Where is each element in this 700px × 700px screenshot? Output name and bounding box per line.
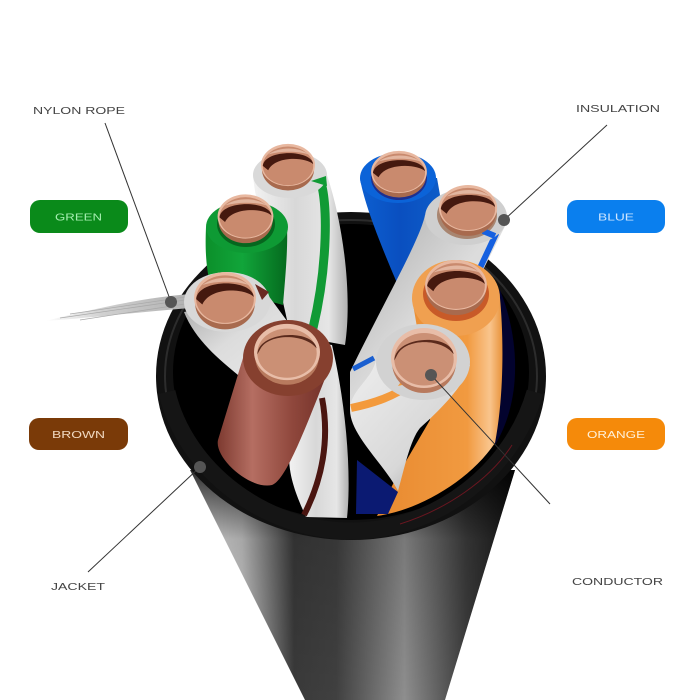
copper conductor: orange-striped [391, 328, 457, 393]
callout: nylon rope [33, 105, 177, 308]
copper conductor: brown [254, 324, 320, 385]
copper conductor: orange [425, 260, 487, 315]
callout: jacket: JACKET [51, 581, 106, 593]
wire: white with green stripe [253, 144, 348, 345]
badge: blue [567, 200, 665, 233]
badge: blue: BLUE [598, 212, 634, 224]
badge: orange: ORANGE [587, 429, 645, 441]
callout: insulation [498, 103, 660, 226]
badge: orange [567, 418, 665, 450]
wire: dark blue lower section [356, 460, 398, 514]
callout: nylon rope: NYLON ROPE [33, 105, 125, 117]
badge: brown: BROWN [52, 429, 105, 441]
badge: green: GREEN [55, 212, 102, 224]
copper conductor: green-striped [261, 144, 315, 191]
wire: white with brown stripe, upper section [184, 272, 290, 375]
copper conductor: green [218, 194, 273, 243]
jacket: outer cable cone [190, 470, 515, 700]
copper conductor: brown-striped [194, 272, 256, 329]
badge: green [30, 200, 128, 233]
wire: blue [360, 151, 440, 283]
callout: conductor: CONDUCTOR [572, 576, 664, 588]
wire: white with brown stripe, lower section [289, 340, 349, 518]
wire: white with blue stripe [350, 185, 507, 410]
wire: orange [377, 260, 502, 516]
wire: white with orange stripe [350, 324, 470, 491]
wire: green [206, 194, 288, 305]
copper conductor: blue [371, 151, 427, 198]
wire: brown [218, 320, 333, 486]
jacket front rim [167, 392, 535, 531]
callout: jacket [51, 461, 206, 593]
callout: conductor [425, 369, 664, 588]
nylon rope strands [45, 294, 190, 321]
copper conductor: blue-striped [439, 185, 497, 236]
jacket rim and interior [156, 212, 546, 540]
callout: insulation: INSULATION [576, 103, 660, 115]
badge: brown [29, 418, 128, 450]
